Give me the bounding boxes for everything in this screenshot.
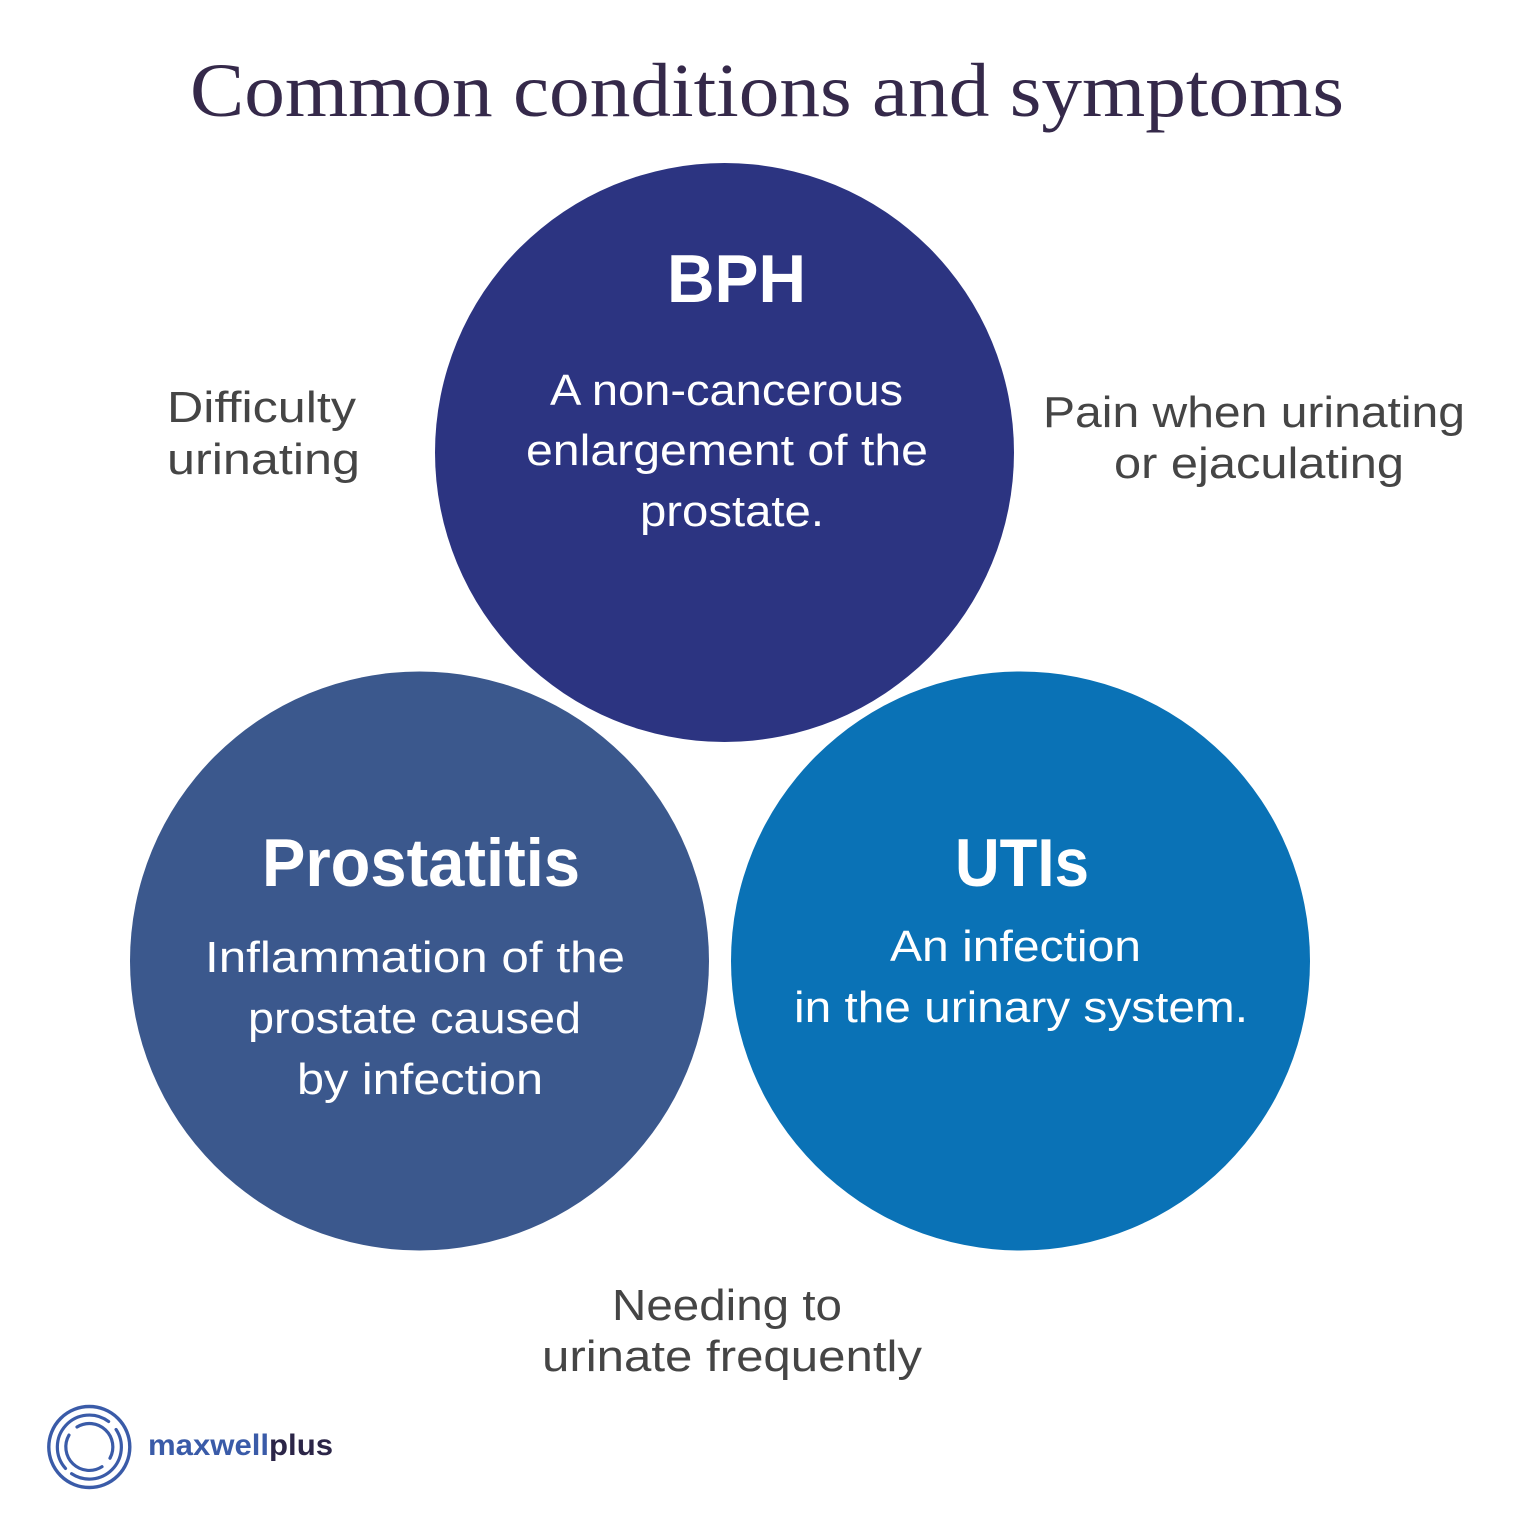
title: Common conditions and symptoms xyxy=(190,49,1344,133)
text: BPH description: enlargement of the xyxy=(526,426,928,475)
heading: Prostatitis: Prostatitis xyxy=(262,825,580,901)
symptom: needing to urinate frequently: Needing to xyxy=(612,1281,842,1330)
text: Prostatitis description: by infection xyxy=(297,1055,543,1104)
text: Prostatitis description: prostate caused xyxy=(248,994,581,1043)
logo: maxwellplus xyxy=(49,1406,333,1488)
symptom: difficulty urinating: Difficulty xyxy=(167,383,356,432)
panel: BPH xyxy=(435,163,1014,742)
heading: UTIs: UTIs xyxy=(955,825,1089,901)
text: BPH description: A non-cancerous xyxy=(550,366,903,415)
symptom: needing to urinate frequently xyxy=(542,1281,922,1381)
symptom: difficulty urinating: urinating xyxy=(167,435,360,484)
icon: concentric rings xyxy=(49,1406,130,1488)
text: UTIs description xyxy=(794,922,1248,1032)
symptom: needing to urinate frequently: urinate frequently xyxy=(542,1332,922,1381)
text: BPH description: prostate. xyxy=(640,487,824,536)
circle: Prostatitis xyxy=(130,672,709,1250)
symptom: pain when urinating: Pain when urinating xyxy=(1043,388,1465,437)
circle: BPH xyxy=(435,163,1014,742)
text: Prostatitis description: Inflammation of the xyxy=(205,933,625,982)
text: BPH description xyxy=(526,366,928,536)
circle: UTIs xyxy=(731,672,1310,1250)
symptom: pain when urinating: or ejaculating xyxy=(1114,439,1404,488)
symptom: pain when urinating xyxy=(1043,388,1465,488)
symptom: difficulty urinating xyxy=(167,383,360,484)
heading: BPH: BPH xyxy=(667,241,806,317)
text: Prostatitis description xyxy=(205,933,625,1104)
text: UTIs description: An infection xyxy=(890,922,1141,971)
logo wordmark: maxwellplus xyxy=(148,1429,333,1462)
panel: Prostatitis xyxy=(130,672,709,1250)
panel: UTIs xyxy=(731,672,1310,1250)
text: UTIs description: in the urinary system. xyxy=(794,983,1248,1032)
